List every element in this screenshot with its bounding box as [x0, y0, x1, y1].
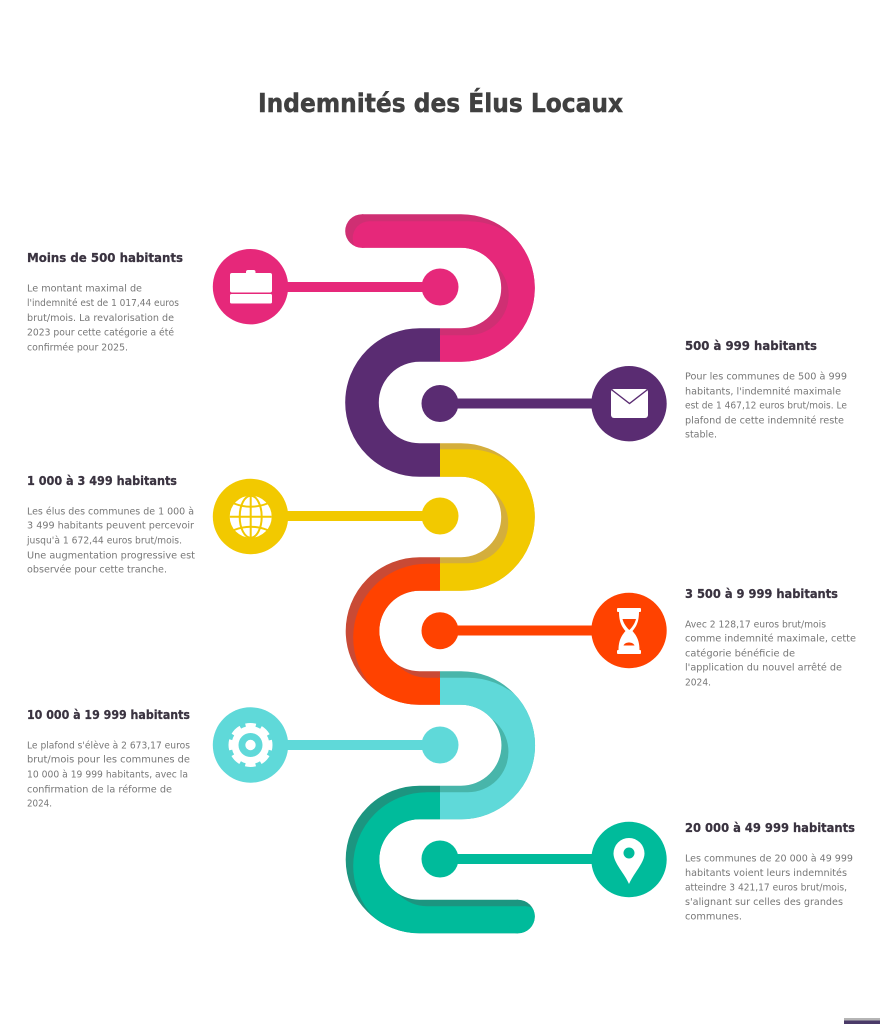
- path segment: green: [362, 802, 542, 940]
- text block: l'indemnité est de 1 017,44 euros: [27, 297, 179, 309]
- icon circle: gear: [213, 707, 288, 783]
- icon circle: envelope: [591, 366, 667, 441]
- text block: s'alignant sur celles des grandes: [685, 897, 843, 908]
- text block: Les élus des communes de 1 000 à: [27, 506, 194, 518]
- text block: 2024.: [685, 678, 711, 688]
- heading: Moins de 500 habitants: [27, 250, 183, 265]
- text block: confirmée pour 2025.: [27, 342, 128, 354]
- connector: [422, 612, 610, 649]
- heading: 1 000 à 3 499 habitants: [27, 473, 177, 488]
- text block: [26, 506, 195, 576]
- text block: Les communes de 20 000 à 49 999: [685, 852, 853, 864]
- panel: 10 000 à 19 999 habitants: [27, 707, 458, 810]
- path segment: yellow: [417, 460, 525, 580]
- connector: [270, 268, 458, 306]
- path segment: cyan: [417, 688, 525, 809]
- text block: Le plafond s'élève à 2 673,17 euros: [27, 740, 190, 752]
- text block: comme indemnité maximale, cette: [685, 632, 856, 644]
- icon circle: hourglass: [591, 593, 667, 668]
- winding path: [345, 214, 542, 940]
- path segment: orange: [362, 574, 478, 694]
- icon circle: map pin: [591, 822, 667, 897]
- path segment: purple: [362, 345, 440, 460]
- heading: 3 500 à 9 999 habitants: [685, 586, 838, 601]
- text block: 2023 pour cette catégorie a été: [27, 326, 174, 338]
- panel: 20 000 à 49 999 habitants: [422, 820, 855, 922]
- text block: est de 1 467,12 euros brut/mois. Le: [685, 400, 847, 412]
- title: Indemnités des Élus Locaux: [258, 87, 623, 119]
- icon circle: briefcase: [213, 249, 288, 324]
- heading: 20 000 à 49 999 habitants: [685, 820, 855, 835]
- icon circle: globe: [213, 479, 288, 554]
- text block: atteindre 3 421,17 euros brut/mois,: [685, 882, 847, 894]
- text block: [27, 284, 179, 354]
- text block: Avec 2 128,17 euros brut/mois: [685, 620, 826, 630]
- text block: 3 499 habitants peuvent percevoir: [27, 520, 195, 532]
- panel: moins de 500 habitants: [27, 249, 458, 354]
- text block: l'application du nouvel arrêté de: [685, 662, 842, 674]
- text block: [27, 740, 190, 810]
- text block: brut/mois. La revalorisation de: [27, 313, 174, 324]
- text block: habitants voient leurs indemnités: [685, 867, 847, 879]
- text block: Pour les communes de 500 à 999: [685, 370, 847, 382]
- text block: communes.: [685, 912, 742, 922]
- text block: [685, 370, 847, 440]
- text block: stable.: [685, 430, 717, 440]
- text block: habitants, l'indemnité maximale: [685, 386, 841, 398]
- path segment: pink: [345, 214, 526, 352]
- panel: 1 000 à 3 499 habitants: [26, 473, 458, 576]
- text block: Le montant maximal de: [27, 284, 142, 294]
- text block: [685, 620, 856, 688]
- panel: 500 à 999 habitants: [422, 338, 847, 441]
- corner mark: [844, 1018, 880, 1024]
- text block: jusqu'à 1 672,44 euros brut/mois.: [26, 534, 182, 546]
- text block: 10 000 à 19 999 habitants, avec la: [27, 768, 188, 780]
- text block: brut/mois pour les communes de: [27, 754, 190, 766]
- connector: [270, 498, 458, 534]
- text block: catégorie bénéficie de: [685, 648, 795, 660]
- connector: [422, 840, 610, 878]
- text block: observée pour cette tranche.: [27, 564, 167, 576]
- text block: plafond de cette indemnité reste: [685, 414, 844, 426]
- text block: confirmation de la réforme de: [27, 784, 172, 796]
- heading: 500 à 999 habitants: [685, 338, 817, 353]
- panel: 3 500 à 9 999 habitants: [422, 586, 856, 688]
- text block: Une augmentation progressive est: [27, 550, 195, 562]
- heading: 10 000 à 19 999 habitants: [27, 707, 190, 722]
- text block: 2024.: [27, 798, 52, 810]
- connector: [422, 385, 610, 422]
- text block: [685, 852, 853, 922]
- connector: [270, 726, 458, 764]
